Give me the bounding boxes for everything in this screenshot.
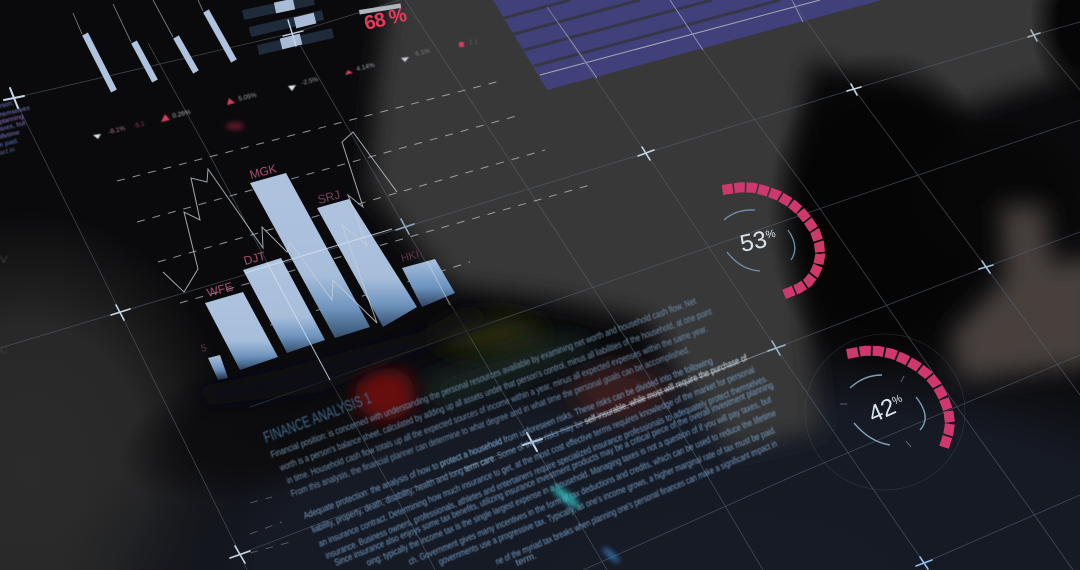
percentage change markers: 1.1	[469, 39, 478, 46]
bar: MGK	[250, 173, 370, 338]
paragraph: adequate protection: an insurance contract. Determining how much insurance to get, at the most cost effective terms requires knowledge of the market for personal	[317, 365, 756, 550]
heading: finance analysis: FINANCE ANALYSIS 1	[261, 390, 374, 447]
bar: WFE	[205, 292, 278, 370]
gauge: 42 percent: 42	[864, 393, 900, 428]
percentage change markers: -5.1	[133, 120, 146, 130]
paragraph: adequate protection: liability, property, death, disability, health and long term care. Some of these risks may be self-insurable, while most will require the purchase of	[310, 352, 749, 536]
gauge: 53 percent: 53	[738, 226, 769, 258]
chart labels: MGK	[248, 161, 278, 182]
paragraph: adequate protection: insurance. Business owners, professionals, athletes and entertainers require specialized insurance professionals to adequately protect themselves.	[324, 373, 769, 562]
gauge: 53 percent	[722, 187, 820, 295]
paragraph: adequate protection: Adequate protection: the analysis of how to protect a household from unforeseen risks. These risks can be divided into the following	[302, 356, 714, 522]
dashed guide lines	[117, 81, 590, 553]
bar: small	[208, 355, 228, 380]
paragraph: adequate protection: ch. Government gives many incentives in the form of tax deductions and credits, which can be used to reduce the lifetime	[407, 408, 778, 568]
percentage change markers: 4.14%	[356, 62, 376, 73]
paragraph: adequate protection: Since insurance also enjoys some tax benefits, utilizing insurance investment products may be a critical piece of the overall investment planning	[333, 380, 775, 569]
bar: HKI	[402, 259, 455, 307]
chart labels: WFE	[205, 279, 235, 300]
dark shadow over bar bases	[195, 304, 495, 405]
left edge cut-off text	[0, 100, 31, 357]
chart labels: HKI	[400, 249, 420, 265]
bar chart	[200, 161, 455, 380]
bright highlight streak across text	[540, 348, 776, 439]
bar: DJT	[243, 258, 325, 353]
paragraph: adequate protection: term.	[514, 550, 539, 569]
bar: SRJ	[317, 199, 417, 327]
glow: teal flare	[550, 483, 582, 511]
glow: blue flare	[601, 546, 621, 564]
percentage change markers	[93, 39, 478, 139]
purple table block	[493, 0, 882, 90]
range bars top	[243, 0, 333, 50]
paragraph: financial position: From this analysis, the financial planner can determine to what degree and in what time the personal goals can be accomplished.	[289, 344, 691, 500]
paragraph: adequate protection: ne of the myriad tax breaks when planning one's personal finances can make a significant impact in	[494, 438, 779, 568]
gauge: 42 percent: %	[890, 393, 904, 408]
paragraph: adequate protection: oing: typically the income tax is the single largest expense in a household. Managing taxes is not a question of if you will pay taxes, but	[365, 394, 773, 569]
percentage change markers: 6.1%	[415, 48, 431, 58]
crosshair lines over bars	[245, 229, 450, 380]
paragraph: adequate protection: governments use a progressive tax. Typically, as one's income grows, a higher marginal rate of tax must be paid.	[437, 425, 778, 568]
chart labels	[200, 161, 420, 355]
chart labels: DJT	[242, 249, 268, 268]
chart labels: 5	[200, 343, 209, 355]
paragraph: financial position: worth is a person's balance sheet, calculated by adding up all assets under that person's control, minus all liabilities of the household, at one point	[278, 306, 714, 474]
percentage change markers: 0.26%	[172, 109, 192, 120]
line chart	[163, 132, 397, 323]
candlestick bars	[73, 0, 234, 91]
left edge cut-off text: C	[0, 345, 8, 357]
paragraph: financial position: Financial position: is concerned with understanding the personal resources available by examining net worth and household cash flow. Net	[269, 296, 698, 461]
percentage change markers: -8.1%	[108, 125, 126, 136]
percentage change markers: 5.05%	[238, 92, 258, 103]
percentage change markers: -2.5%	[301, 76, 319, 87]
left edge cut-off text: V	[0, 254, 8, 266]
testing progress label and 68 percent: 68 %	[362, 4, 409, 35]
gauge: 53 percent: %	[765, 228, 777, 242]
chart labels: SRJ	[316, 188, 342, 207]
paragraph: financial position: in time. Household cash flow totals up all the expected sources of income within a year, minus all expected expenses within the same year.	[285, 324, 709, 487]
gauge: 42 percent	[805, 334, 965, 490]
